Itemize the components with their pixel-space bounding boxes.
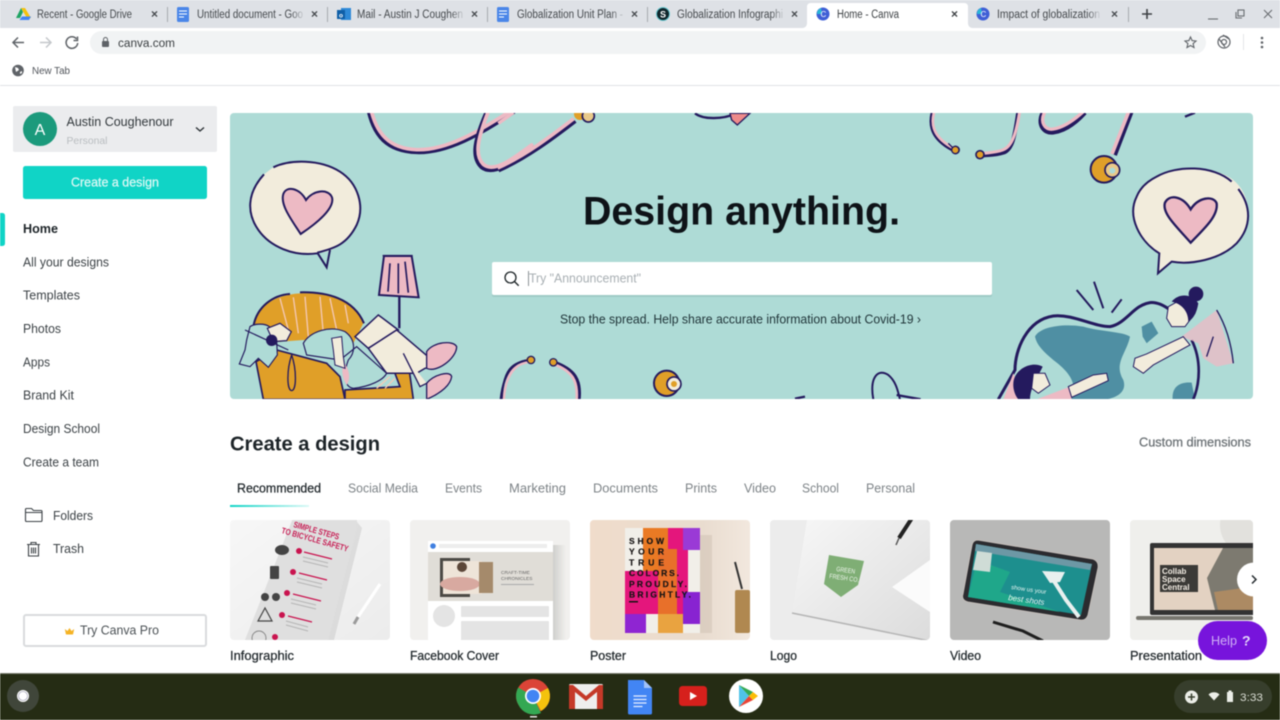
armchair	[253, 292, 413, 399]
tab: Mail: o	[339, 12, 343, 20]
card: Infographic	[230, 518, 390, 663]
card: Video: Video	[950, 649, 981, 663]
navigation list: Photos	[23, 322, 61, 336]
tab: Globalization Infographic: S	[660, 10, 666, 20]
address bar	[90, 31, 1206, 54]
try canva pro button: Try Canva Pro	[80, 624, 159, 638]
card: Facebook Cover: CHRONICLES	[501, 576, 532, 582]
tab: Globalization Infographic	[656, 6, 798, 22]
card: Facebook Cover: CRAFT-TIME	[501, 570, 530, 576]
profile switcher	[13, 106, 217, 152]
tab: Home - Canva label: ×	[951, 7, 958, 21]
custom dimensions link: Custom dimensions	[1139, 436, 1251, 450]
profile switcher: Personal	[66, 135, 108, 147]
icon: youtube	[679, 686, 707, 706]
category tabs	[237, 482, 915, 496]
tab: Mail	[337, 6, 478, 22]
active nav indicator	[0, 213, 5, 246]
category tabs: Events	[445, 482, 482, 496]
sidebar	[0, 106, 217, 646]
burst lines	[1077, 282, 1122, 313]
card: Video: best shots	[1008, 593, 1045, 607]
navigation list: Create a team	[23, 456, 99, 470]
tab: Recent - Google Drive: Recent - Google Drive	[37, 9, 132, 21]
woman reading on chair	[239, 315, 457, 399]
active tab: Home - Canva	[803, 3, 972, 28]
category tabs: Social Media	[348, 482, 418, 496]
browser menu dots	[1261, 37, 1263, 48]
tab: Home - Canva label	[816, 7, 958, 21]
card: Video	[950, 520, 1110, 663]
trash link	[27, 542, 84, 556]
tab: Globalization Unit Plan: ×	[631, 7, 638, 21]
new tab plus	[1142, 9, 1152, 19]
browser tab strip	[0, 0, 1280, 28]
search box: Try "Announcement"	[529, 272, 641, 286]
card: Logo: FRESH CO.	[829, 573, 860, 584]
status tray	[1174, 680, 1272, 713]
navigation list	[23, 222, 109, 470]
tab: Impact of globalization: C	[980, 10, 986, 19]
hero banner	[230, 108, 1253, 400]
profile switcher: A	[35, 122, 46, 139]
active tab underline	[230, 505, 309, 507]
card: Poster: PROUDLY.	[629, 579, 687, 589]
tab: Globalization Unit Plan: Globalization Unit Plan -	[517, 9, 623, 21]
card: Logo: GREEN	[836, 566, 856, 576]
try canva pro button	[24, 615, 206, 646]
tab: Mail: Mail - Austin J Coughen	[357, 9, 463, 21]
navigation list: Brand Kit	[23, 388, 75, 402]
card: Video: show us your	[1011, 585, 1047, 596]
tab: Impact of globalization	[976, 6, 1118, 22]
bookmark: New Tab	[12, 65, 70, 77]
category tabs: Personal	[866, 482, 915, 496]
tab: Untitled document: Untitled document - Goo	[197, 9, 303, 21]
category tabs: Prints	[685, 482, 717, 496]
folders link: Folders	[53, 509, 93, 523]
category tabs: Video	[744, 482, 776, 496]
floor lamp	[379, 256, 419, 328]
category tabs: Documents	[593, 482, 658, 496]
tab: Home - Canva label: C	[820, 10, 826, 19]
headline: Design anything.	[583, 190, 900, 234]
speech bubble with heart	[250, 162, 360, 267]
card: Presentation: Space	[1162, 575, 1186, 584]
back, forward and reload buttons	[13, 36, 78, 48]
card: Presentation	[1130, 520, 1254, 661]
card: Presentation: Presentation	[1130, 649, 1202, 663]
navigation list: All your designs	[23, 256, 109, 270]
tab: Recent - Google Drive: ×	[151, 7, 158, 21]
folders link	[26, 508, 93, 523]
create a design button	[23, 166, 207, 199]
category tabs: Recommended	[237, 482, 321, 496]
navigation list: Apps	[23, 356, 50, 370]
lower stethoscope tube	[501, 360, 528, 399]
icon: play store	[729, 679, 763, 713]
illustration: left side	[239, 110, 532, 399]
carousel next arrow	[1237, 562, 1271, 596]
card: Poster: Poster	[590, 649, 626, 663]
covid notice link: Stop the spread. Help share accurate information about Covid-19 ›	[560, 312, 921, 326]
navigation list: Home	[23, 222, 58, 236]
tab: Impact of globalization: Impact of globalization	[997, 9, 1100, 21]
category tabs: Marketing	[509, 482, 566, 496]
bookmark: New Tab: New Tab	[32, 66, 70, 77]
help button: ?	[1242, 632, 1251, 648]
tab: Recent - Google Drive	[16, 7, 158, 21]
icon: gmail	[569, 684, 603, 709]
address bar: canva.com	[118, 38, 175, 50]
illustration: centre stethoscope pieces	[498, 108, 959, 399]
card: Poster: TRUE	[629, 557, 664, 567]
card: Infographic: TO BICYCLE SAFETY	[280, 525, 350, 554]
stethoscope tubes and knob	[948, 111, 1195, 159]
navigation list: Design School	[23, 422, 100, 436]
card: Logo	[770, 518, 930, 663]
help button: Help	[1211, 634, 1237, 648]
create a design button: Create a design	[71, 176, 159, 190]
browser toolbar	[0, 28, 1280, 86]
illustration: right side	[948, 111, 1248, 400]
card: Poster	[590, 520, 750, 663]
speech bubble with heart	[1133, 168, 1248, 273]
card: Poster: BRIGHTLY.	[629, 590, 691, 600]
icon: chrome	[516, 679, 550, 715]
icon: google docs	[628, 680, 652, 714]
card: Presentation: Central	[1162, 583, 1190, 592]
category tabs: School	[802, 482, 839, 496]
window controls	[1208, 10, 1272, 19]
tab: Globalization Unit Plan	[497, 6, 638, 22]
search box	[492, 262, 992, 297]
tab: Impact of globalization: ×	[1111, 7, 1118, 21]
card: Poster: YOUR	[629, 547, 664, 557]
navigation list: Templates	[23, 288, 80, 302]
card: Facebook Cover: Facebook Cover	[410, 649, 499, 663]
card: Poster: COLORS.	[629, 568, 679, 578]
tab: Mail: ×	[471, 7, 478, 21]
tab: Globalization Infographic: ×	[791, 7, 798, 21]
extension icon	[1218, 35, 1230, 48]
help button	[1198, 621, 1267, 660]
chromebook shelf	[0, 673, 1280, 720]
card: Logo: Logo	[770, 649, 797, 663]
tab: Untitled document: ×	[311, 7, 318, 21]
globe with two people	[998, 287, 1233, 400]
profile switcher: Austin Coughenour	[66, 115, 174, 129]
stethoscope tubes	[369, 110, 532, 170]
tab: Home - Canva label: Home - Canva	[837, 9, 900, 21]
launcher button	[7, 680, 39, 712]
card: Infographic: Infographic	[230, 649, 294, 663]
card: Facebook Cover	[410, 520, 570, 663]
tab: Untitled document	[177, 6, 318, 22]
card: Infographic: SIMPLE STEPS	[292, 519, 341, 542]
tab: Globalization Infographic: Globalization Infographi	[677, 9, 783, 21]
card: Poster: SHOW	[629, 536, 665, 546]
status tray: 3:33	[1240, 692, 1263, 704]
card: Presentation: Collab	[1162, 567, 1187, 576]
trash link: Trash	[53, 542, 84, 556]
section heading: create a design: Create a design	[230, 432, 380, 456]
